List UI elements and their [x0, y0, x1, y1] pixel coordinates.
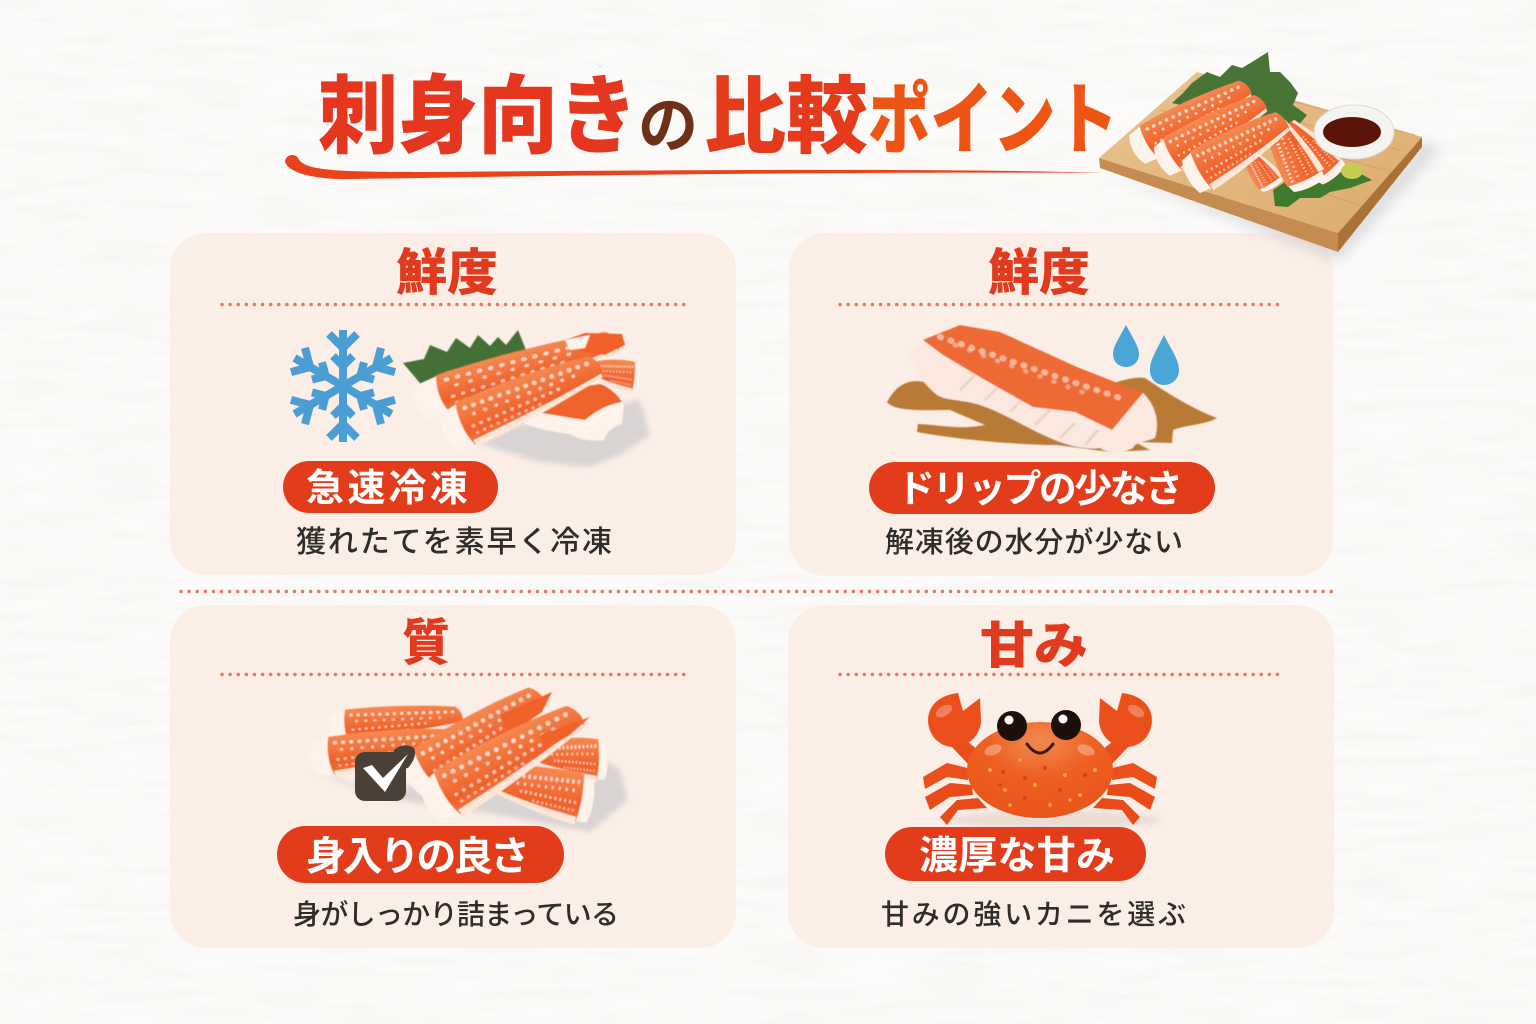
illustration: crab meat with drip	[887, 325, 1217, 452]
label pill: quick freezing	[283, 461, 498, 513]
wasabi	[1341, 163, 1363, 179]
label pill: rich sweetness	[885, 827, 1146, 881]
panel: top-right freshness	[789, 233, 1333, 576]
description: 解凍後の水分が少ない	[885, 526, 1183, 559]
label pill: quick freezing: 急速冷凍	[306, 468, 468, 510]
title: の	[638, 92, 698, 161]
icon: checkbox	[355, 745, 415, 801]
heading: freshness: 鮮度	[396, 245, 498, 301]
title: 刺身向き	[318, 69, 638, 165]
panel: bottom-right sweetness	[788, 605, 1334, 948]
description: 獲れたてを素早く冷凍	[296, 526, 612, 559]
sticks	[1276, 110, 1350, 189]
label pill: little drip: ドリップの少なさ	[897, 469, 1183, 511]
title	[318, 69, 1118, 165]
illustration: crab legs with leaf	[403, 325, 650, 467]
icon: water drops	[1113, 325, 1179, 385]
illustration: crab mascot	[923, 693, 1160, 829]
icon: snowflake	[288, 330, 398, 442]
heading: texture: 質	[402, 615, 450, 671]
label pill: little drip	[869, 462, 1215, 514]
heading: sweetness: 甘み	[980, 618, 1088, 674]
heading: freshness: 鮮度	[988, 245, 1090, 301]
panel: top-left freshness	[170, 233, 736, 575]
dish with soy sauce	[1314, 105, 1394, 159]
panel: bottom-left texture	[170, 605, 736, 948]
label pill: well filled meat	[277, 826, 564, 883]
title: ポイント	[868, 76, 1118, 164]
shiso leaves	[1172, 52, 1307, 127]
description: 身がしっかり詰まっている	[293, 899, 619, 930]
label pill: rich sweetness: 濃厚な甘み	[919, 835, 1115, 878]
description: 甘みの強いカニを選ぶ	[881, 899, 1186, 930]
illustration: crab legs	[308, 679, 628, 832]
label pill: well filled meat: 身入りの良さ	[306, 835, 530, 879]
illustration: crab platter on wooden board	[1099, 52, 1440, 262]
center dotted divider	[181, 590, 1332, 593]
title underline brush stroke	[285, 155, 1103, 179]
title: 比較	[704, 70, 868, 164]
